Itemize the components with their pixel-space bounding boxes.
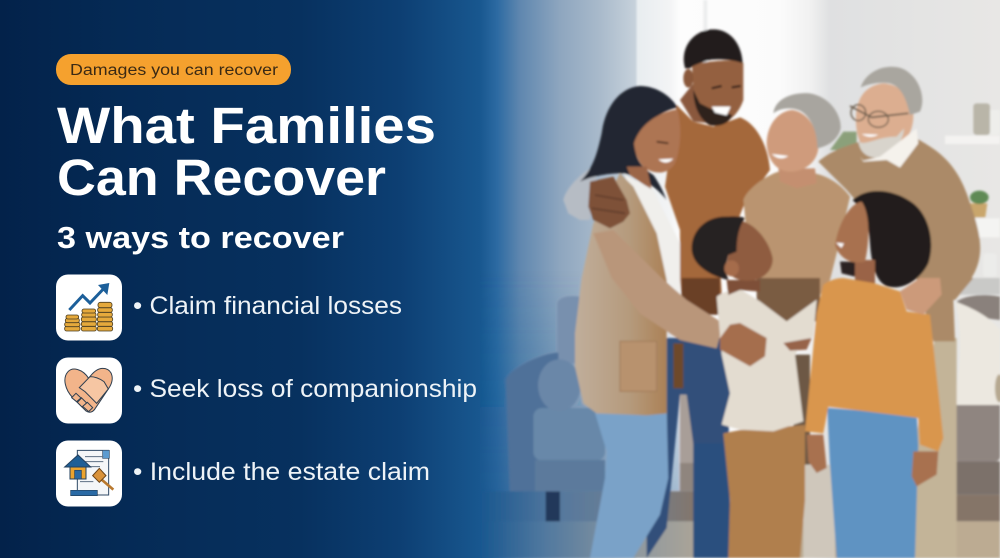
icon: handshake heart — [56, 358, 122, 424]
boy — [692, 216, 817, 558]
list item: loss of companionship: • Seek loss of companionship — [133, 375, 477, 403]
lower wall shade — [480, 270, 695, 558]
title: What Families — [57, 97, 436, 154]
floor carpet — [480, 491, 1000, 558]
mother — [575, 86, 723, 558]
girl — [805, 191, 943, 558]
list item: estate claim: • Include the estate claim — [133, 458, 430, 486]
hands over children — [720, 278, 973, 366]
window frame — [703, 0, 707, 83]
grandmother — [743, 93, 850, 558]
badge: damages you can recover: Damages you can recover — [70, 62, 278, 79]
list item: financial losses — [56, 274, 402, 340]
sofa — [506, 295, 1000, 521]
badge: damages you can recover — [56, 54, 291, 85]
icon: coins and rising arrow — [56, 274, 122, 340]
right wall decor — [830, 103, 1000, 295]
title: Can Recover — [57, 149, 386, 206]
list item: financial losses: • Claim financial losses — [133, 292, 402, 320]
photo: family in living room — [480, 0, 1000, 558]
list item: loss of companionship — [56, 358, 477, 424]
subheading: 3 ways to recover — [57, 220, 344, 255]
icon: house, document and gavel — [56, 440, 122, 506]
grandfather — [818, 67, 980, 558]
father — [563, 29, 770, 558]
list item: estate claim — [56, 440, 430, 506]
